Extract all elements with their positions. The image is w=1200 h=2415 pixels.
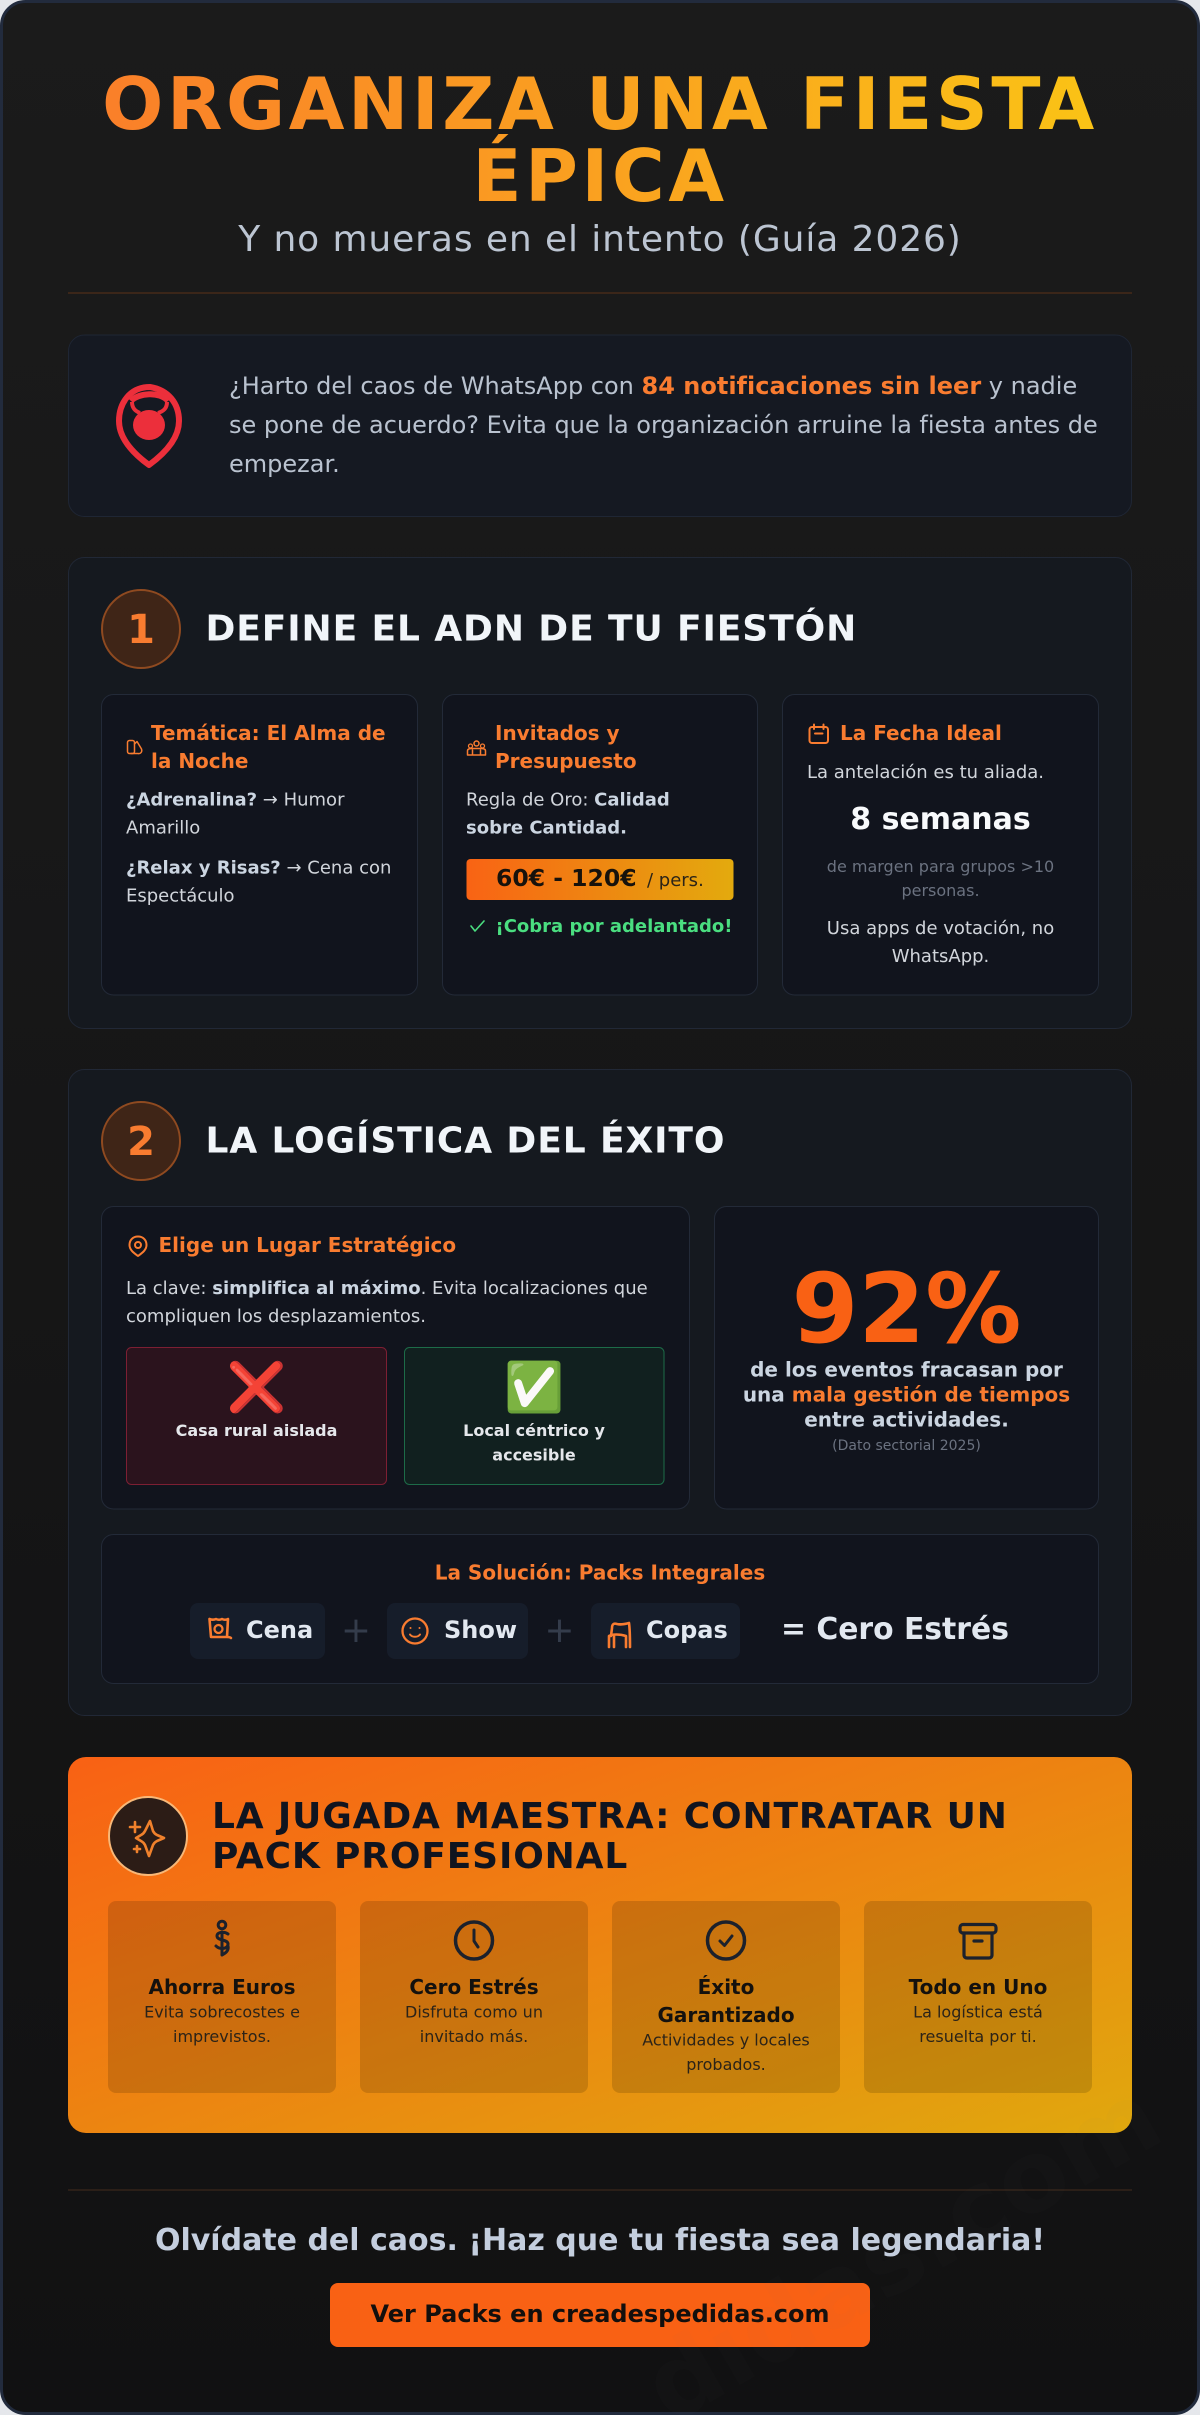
advance payment note: ¡Cobra por adelantado! — [496, 916, 732, 937]
chip: show — [387, 1603, 528, 1659]
card text — [126, 1278, 648, 1327]
option: bad venue — [126, 1348, 386, 1484]
card: lugar — [102, 1206, 690, 1509]
intro text — [229, 372, 1098, 478]
plus: + — [544, 1610, 575, 1651]
step number 1 — [102, 590, 180, 668]
button: Ver Packs en creadespedidas.com — [370, 2300, 830, 2328]
intro text: empezar. — [229, 450, 340, 478]
voting note: Usa apps de votación, no — [827, 918, 1054, 939]
tile: exito: probados. — [686, 2055, 766, 2074]
call to action text: Olvídate del caos. ¡Haz que tu fiesta sea legendaria! — [155, 2223, 1045, 2258]
chip: copas: Copas — [646, 1616, 728, 1644]
icon: coin chain — [216, 1921, 228, 1955]
icon: group — [468, 741, 486, 755]
card text: ¿Relax y Risas? → Cena con — [126, 858, 391, 878]
card text: Amarillo — [126, 818, 200, 838]
tile: cero estres: invitado más. — [420, 2027, 528, 2046]
card heading: La Fecha Ideal — [840, 721, 1002, 745]
option: good venue — [404, 1348, 664, 1484]
tile: todo en uno: La logística está — [913, 2002, 1043, 2022]
statistic text — [743, 1358, 1070, 1432]
big number: 92% — [792, 1253, 1021, 1365]
title: ÉPICA — [472, 134, 728, 218]
tile: ahorra: Ahorra Euros — [148, 1975, 296, 1999]
card text: Regla de Oro: Calidad — [466, 790, 670, 810]
icon: sparkles — [109, 1797, 187, 1875]
option: good venue: ✅ — [504, 1358, 564, 1416]
icon: red alert pin — [119, 387, 179, 465]
tile: cero estres — [360, 1901, 588, 2093]
card text: La antelación es tu aliada. — [807, 762, 1044, 783]
chip: copas — [591, 1603, 740, 1659]
card text: Espectáculo — [126, 886, 235, 906]
tile: cero estres: Disfruta como un — [405, 2002, 543, 2022]
step number 1: 1 — [127, 607, 155, 653]
chip: show: Show — [444, 1616, 517, 1644]
card text — [126, 790, 391, 906]
tile: cero estres: Cero Estrés — [409, 1975, 539, 1999]
tile: todo en uno: resuelta por ti. — [919, 2027, 1037, 2046]
option: good venue: accesible — [492, 1446, 576, 1464]
stat: 8 semanas: 8 semanas — [850, 802, 1031, 837]
source: (Dato sectorial 2025) — [832, 1438, 981, 1454]
icon: calendar — [810, 724, 828, 743]
card heading: Invitados y — [495, 721, 620, 745]
tile: todo en uno — [864, 1901, 1092, 2093]
card heading: Presupuesto — [495, 749, 637, 773]
option: bad venue: Casa rural aislada — [176, 1421, 337, 1440]
statistic text: entre actividades. — [804, 1408, 1009, 1432]
statistic text: de los eventos fracasan por — [750, 1358, 1063, 1382]
price tag: 60€ - 120€ — [496, 864, 637, 892]
title: ORGANIZA UNA FIESTA — [102, 62, 1098, 146]
card text: sobre Cantidad. — [466, 818, 627, 838]
card heading: Temática: El Alma de — [151, 721, 386, 745]
card: invitados — [442, 694, 758, 995]
icon: map pin — [130, 1236, 146, 1256]
voting note: WhatsApp. — [892, 946, 989, 967]
icon: clock — [456, 1922, 492, 1959]
button — [330, 2283, 870, 2347]
card: tematica — [102, 694, 418, 995]
card heading — [151, 721, 386, 773]
tile: exito: Éxito — [698, 1975, 754, 1999]
tile: ahorra — [108, 1901, 336, 2093]
option: bad venue: ❌ — [227, 1358, 286, 1416]
card: solution — [102, 1534, 1098, 1684]
icon: palette — [128, 740, 142, 754]
panel: intro — [68, 335, 1132, 516]
panel: section 2 — [68, 1070, 1132, 1716]
chip: cena — [190, 1603, 325, 1659]
heading: master move — [212, 1796, 1008, 1877]
tile: ahorra: Evita sobrecostes e — [144, 2002, 300, 2022]
result: = Cero Estrés — [781, 1612, 1009, 1647]
icon: check circle — [708, 1922, 744, 1959]
tile: exito: Garantizado — [657, 2003, 795, 2027]
heading: master move: LA JUGADA MAESTRA: CONTRATAR UN — [212, 1796, 1008, 1837]
margin note — [827, 857, 1054, 900]
card text — [466, 790, 670, 838]
plus: + — [341, 1610, 371, 1651]
card heading: Elige un Lugar Estratégico — [158, 1233, 456, 1257]
tile: todo en uno: Todo en Uno — [909, 1975, 1047, 1999]
heading: logistica: LA LOGÍSTICA DEL ÉXITO — [206, 1120, 725, 1162]
card text: La clave: simplifica al máximo. Evita localizaciones que — [126, 1278, 648, 1299]
panel: section 1 — [68, 558, 1132, 1028]
panel: master move — [68, 1757, 1132, 2133]
card heading — [495, 721, 637, 773]
subtitle: Y no mueras en el intento (Guía 2026) — [237, 219, 962, 260]
margin note: de margen para grupos >10 — [827, 857, 1054, 876]
price tag — [466, 859, 734, 900]
chip: cena: Cena — [246, 1616, 313, 1644]
step number 2 — [102, 1102, 180, 1180]
tile: ahorra: imprevistos. — [173, 2027, 271, 2046]
tile: exito — [612, 1901, 840, 2093]
tile: exito: Actividades y locales — [642, 2030, 810, 2050]
margin note: personas. — [901, 881, 980, 900]
heading: master move: PACK PROFESIONAL — [212, 1836, 628, 1877]
voting note — [827, 918, 1054, 967]
heading: define: DEFINE EL ADN DE TU FIESTÓN — [206, 608, 857, 650]
title — [102, 62, 1098, 218]
price tag: / pers. — [647, 870, 704, 891]
icon: archive box — [960, 1924, 996, 1958]
statistic text: una mala gestión de tiempos — [743, 1382, 1070, 1406]
card: fecha — [782, 694, 1098, 995]
intro text: se pone de acuerdo? Evita que la organización arruine la fiesta antes de — [229, 411, 1098, 439]
card: statistic — [714, 1206, 1098, 1509]
solution heading: La Solución: Packs Integrales — [435, 1560, 765, 1584]
option: good venue: Local céntrico y — [463, 1421, 605, 1440]
card heading: la Noche — [151, 749, 248, 773]
step number 2: 2 — [127, 1119, 155, 1165]
intro text: ¿Harto del caos de WhatsApp con 84 notificaciones sin leer y nadie — [229, 372, 1077, 400]
card text: compliquen los desplazamientos. — [126, 1306, 426, 1327]
card text: ¿Adrenalina? → Humor — [126, 790, 345, 810]
